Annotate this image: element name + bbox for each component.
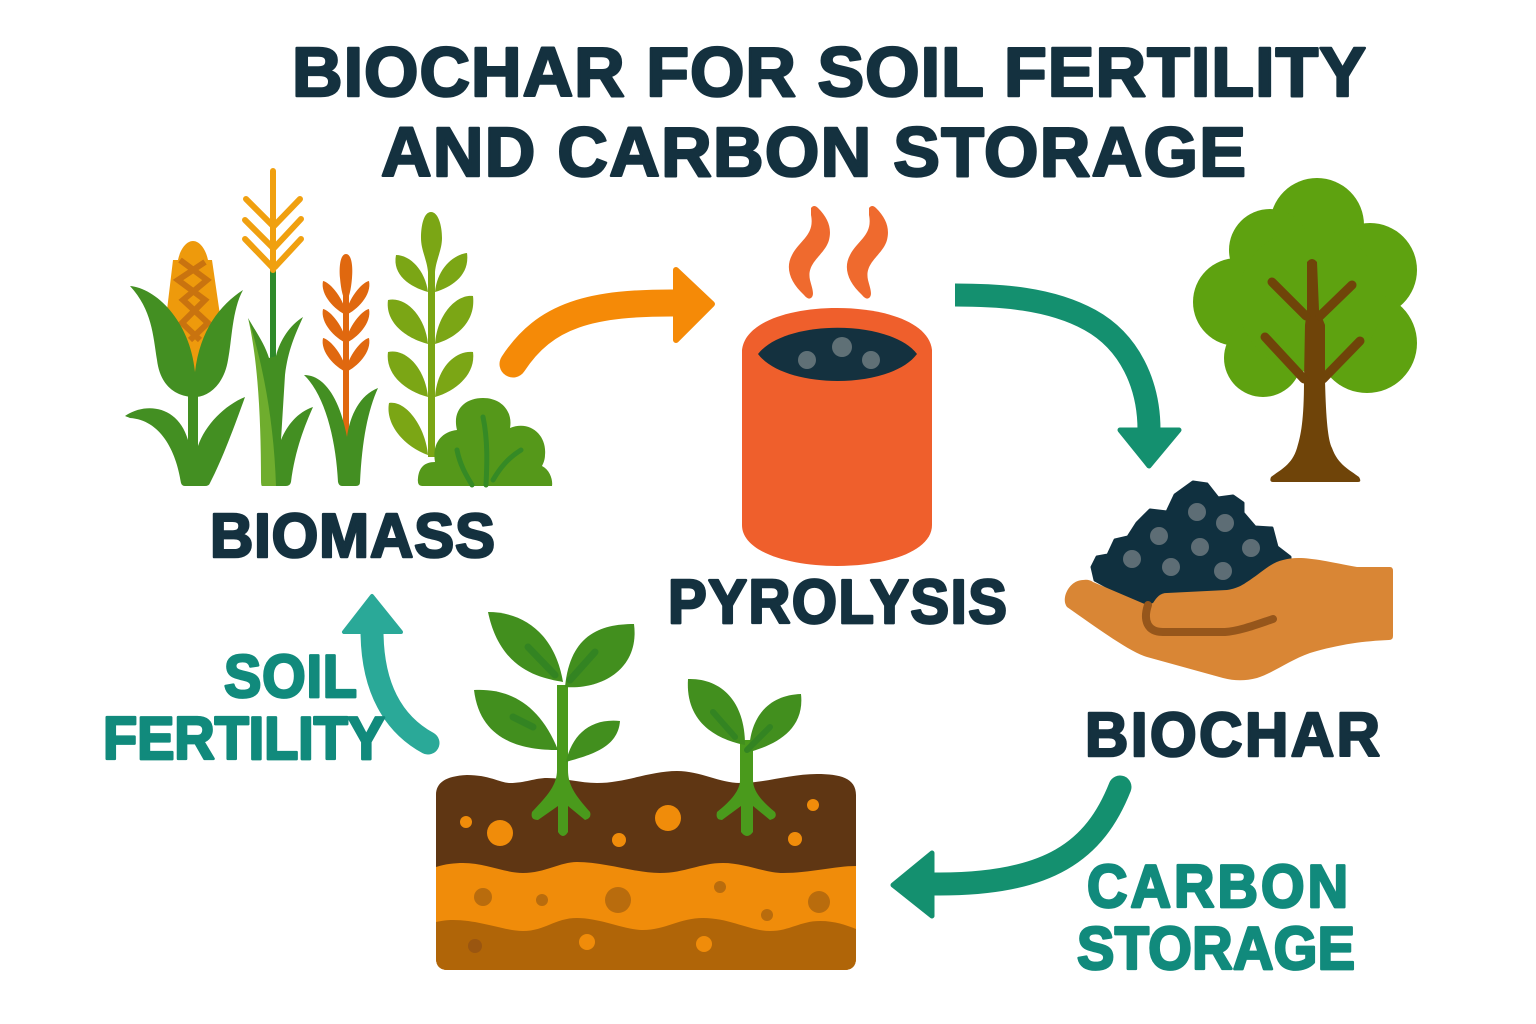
icon: tree bbox=[1193, 178, 1417, 482]
label: carbon storage: STORAGE bbox=[1077, 915, 1355, 982]
label: pyrolysis: PYROLYSIS bbox=[668, 567, 1007, 636]
title bbox=[292, 33, 1366, 191]
icon: soil layers bbox=[436, 771, 856, 970]
orange plant bbox=[304, 254, 378, 486]
wheat plant bbox=[245, 171, 313, 486]
corn plant bbox=[125, 241, 245, 486]
title: AND CARBON STORAGE bbox=[381, 113, 1246, 191]
label: biomass: BIOMASS bbox=[210, 501, 495, 570]
icon: biochar in hand bbox=[1065, 482, 1393, 680]
bush bbox=[418, 398, 552, 486]
label: soil fertility bbox=[103, 643, 385, 772]
icon: biomass plants bbox=[125, 171, 552, 486]
label: carbon storage bbox=[1077, 853, 1355, 982]
label: biochar: BIOCHAR bbox=[1085, 700, 1380, 769]
label: soil fertility: SOIL bbox=[224, 643, 357, 710]
icon: steam bbox=[789, 206, 888, 299]
icon: small seedling bbox=[688, 679, 801, 836]
green leafy plant bbox=[388, 212, 473, 457]
char pile bbox=[1092, 482, 1290, 610]
label: soil fertility: FERTILITY bbox=[103, 705, 385, 772]
arrow: biochar to soil bbox=[893, 787, 1120, 916]
thumb crease bbox=[1146, 605, 1273, 632]
label: carbon storage: CARBON bbox=[1087, 853, 1348, 920]
arrow: pyrolysis to biochar bbox=[955, 295, 1179, 466]
arrow: biomass to pyrolysis bbox=[513, 270, 712, 364]
icon: pyrolysis kiln bbox=[742, 308, 932, 566]
title: BIOCHAR FOR SOIL FERTILITY bbox=[292, 33, 1366, 111]
arrow: soil fertility to biomass bbox=[344, 596, 428, 743]
icon: large seedling bbox=[474, 612, 635, 836]
hand bbox=[1065, 558, 1393, 680]
